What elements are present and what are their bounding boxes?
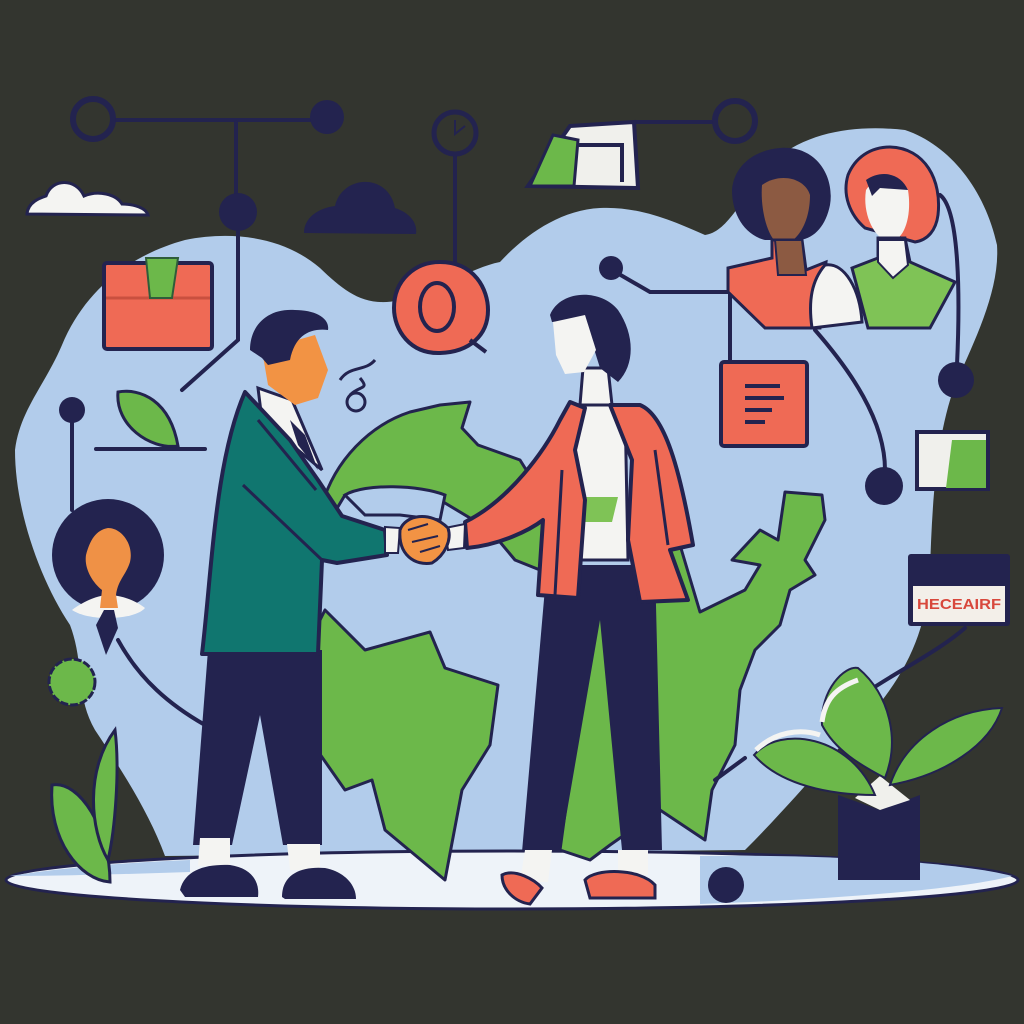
icon: potted plant right	[754, 668, 1002, 880]
man shoes	[180, 865, 356, 899]
woman cardigan	[465, 402, 693, 602]
avatar: woman with dark curly hair	[728, 148, 831, 328]
man cuff	[385, 527, 400, 553]
woman trousers	[522, 565, 662, 852]
sign with label: HECEAIRF	[917, 596, 1001, 613]
panel: light blue background blob	[15, 128, 997, 856]
woman face	[553, 315, 596, 374]
ground ellipse	[6, 851, 1018, 909]
node: top right ring	[715, 101, 755, 141]
icon: red document	[721, 362, 807, 446]
doodle: small squiggle	[340, 360, 375, 411]
continent: lower left	[310, 610, 498, 880]
node: right lower	[865, 467, 903, 505]
woman cuff	[445, 524, 465, 550]
network connectors	[72, 120, 965, 780]
icon: red box with green badge	[104, 258, 212, 349]
man socks	[198, 838, 320, 870]
icon: green globe dot	[49, 659, 95, 705]
person: woman in red cardigan	[445, 295, 693, 904]
node: ground	[708, 867, 744, 903]
avatar: circle portrait left	[52, 499, 164, 655]
woman neck	[580, 368, 612, 405]
person: man in teal suit	[180, 310, 400, 899]
node: clock ring	[434, 112, 476, 154]
node: right small	[599, 256, 623, 280]
icon: document with green triangle	[528, 122, 638, 188]
handshake	[400, 516, 449, 563]
man legs	[193, 650, 322, 845]
icon: speech bubble	[394, 262, 488, 353]
continent: right	[560, 492, 825, 860]
man neck and shirt	[258, 388, 322, 470]
node: left small	[59, 397, 85, 423]
node: top left ring	[73, 99, 113, 139]
sign with label	[908, 554, 1010, 626]
woman hair	[550, 295, 631, 382]
node: right upper	[938, 362, 974, 398]
node: mid solid	[219, 193, 257, 231]
icon: leaf	[118, 391, 178, 446]
icon: navy cloud	[304, 182, 416, 234]
icon: white cloud	[27, 182, 148, 215]
woman socks	[520, 850, 648, 882]
white highlight behind handshake	[345, 487, 445, 520]
man hair	[250, 310, 328, 365]
avatar: person with red hair	[811, 147, 955, 328]
icon: white and green card	[917, 432, 988, 489]
man jacket	[202, 392, 387, 654]
woman top	[565, 405, 628, 560]
man face	[262, 335, 328, 405]
world map: green continents	[310, 402, 825, 880]
node: top solid	[310, 100, 344, 134]
continent: upper	[322, 402, 545, 570]
icon: left leaves plant	[52, 730, 117, 882]
woman shoes	[502, 872, 655, 904]
